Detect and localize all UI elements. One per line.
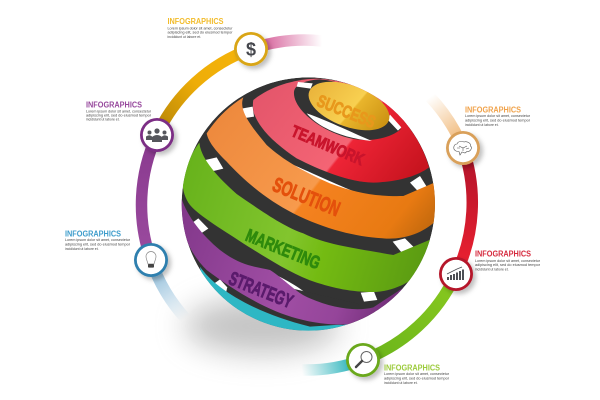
text block: peach: Lorem ipsum dolor sit amet, consectetur: [465, 114, 531, 118]
white gaps on cap: [297, 82, 401, 141]
node: magnifier: [346, 343, 380, 377]
text block: green: adipiscing elit, sed do eiusmod tempor: [384, 376, 450, 380]
text block: purple: [86, 100, 152, 122]
text block: red: INFOGRAPHICS: [475, 250, 532, 259]
text block: blue: INFOGRAPHICS: [65, 230, 122, 239]
arc: yellow: [157, 49, 251, 135]
arc: red: [456, 148, 472, 274]
arc: blue fade: [151, 260, 186, 319]
band: purple: [180, 193, 410, 325]
white gaps: [191, 107, 427, 302]
text block: purple: Lorem ipsum dolor sit amet, consectetur: [86, 109, 152, 113]
text block: purple: incididunt ut labore et.: [86, 118, 120, 122]
text block: green: incididunt ut labore et.: [384, 381, 418, 385]
label: strategy: STRATEGY: [225, 268, 296, 313]
node: dollar: [234, 32, 268, 66]
text block: peach: adipiscing elit, sed do eiusmod tempor: [465, 118, 531, 122]
text block: blue: [65, 230, 131, 251]
arc: purple: [141, 135, 157, 260]
text block: yellow: [168, 17, 233, 39]
arc: pink fade: [251, 40, 322, 49]
sphere labels: [225, 90, 379, 313]
arc: teal fade: [302, 360, 363, 370]
top disc: [308, 82, 390, 130]
text block: red: Lorem ipsum dolor sit amet, consectetur: [475, 259, 541, 263]
ring of coloured arcs: [141, 40, 472, 370]
band: green: [183, 143, 433, 292]
text block: green: INFOGRAPHICS: [384, 363, 441, 372]
arc: peach fade: [430, 97, 463, 148]
text block: green: Lorem ipsum dolor sit amet, consectetur: [384, 372, 450, 376]
dark cap around top disc: [294, 79, 401, 140]
text block: red: incididunt ut labore et.: [475, 267, 509, 271]
icon: magnifying glass: [356, 352, 372, 367]
label: teamwork: TEAMWORK: [288, 122, 367, 169]
text block: red: adipiscing elit, sed do eiusmod tempor: [475, 263, 541, 267]
text block: yellow: incididunt ut labore et.: [168, 35, 201, 39]
node: brain: [446, 131, 480, 165]
3D striped sphere: [180, 72, 437, 337]
sphere dark core: [182, 77, 435, 331]
label: solution: SOLUTION: [269, 173, 343, 221]
text block: yellow: INFOGRAPHICS: [168, 17, 224, 26]
label: marketing: MARKETING: [243, 225, 323, 273]
text block: peach: INFOGRAPHICS: [465, 106, 522, 115]
text block: blue: incididunt ut labore et.: [65, 247, 99, 251]
text block: yellow: adipiscing elit, sed do eiusmod tempor: [168, 31, 233, 35]
text block: blue: adipiscing elit, sed do eiusmod tempor: [65, 242, 131, 246]
icon: team people: [146, 128, 168, 142]
icon: bar chart: [447, 267, 464, 280]
icon: brain: [454, 141, 471, 155]
text block: yellow: Lorem ipsum dolor sit amet, consectetur: [168, 26, 233, 30]
teal dark stripe: [226, 288, 374, 325]
text block: green: [384, 363, 450, 385]
band: teal: [200, 267, 350, 337]
text block: blue: Lorem ipsum dolor sit amet, consectetur: [65, 238, 131, 242]
node: team: [140, 118, 174, 152]
arc: green: [363, 274, 456, 360]
icon: light bulb: [146, 252, 156, 268]
band: orange: [207, 97, 437, 239]
infographic canvas: [65, 18, 540, 384]
band: red: [253, 79, 429, 183]
text block: purple: adipiscing elit, sed do eiusmod tempor: [86, 114, 152, 118]
sphere ground shadow: [184, 298, 340, 354]
text block: purple: INFOGRAPHICS: [86, 100, 143, 109]
icon: dollar sign: $: [246, 40, 256, 60]
text block: peach: incididunt ut labore et.: [465, 123, 499, 127]
text block: peach: [465, 106, 531, 127]
label: success: SUCCESS: [314, 90, 379, 132]
node: bulb: [134, 243, 168, 277]
text block: red: [475, 250, 541, 271]
node: chart: [439, 257, 473, 291]
